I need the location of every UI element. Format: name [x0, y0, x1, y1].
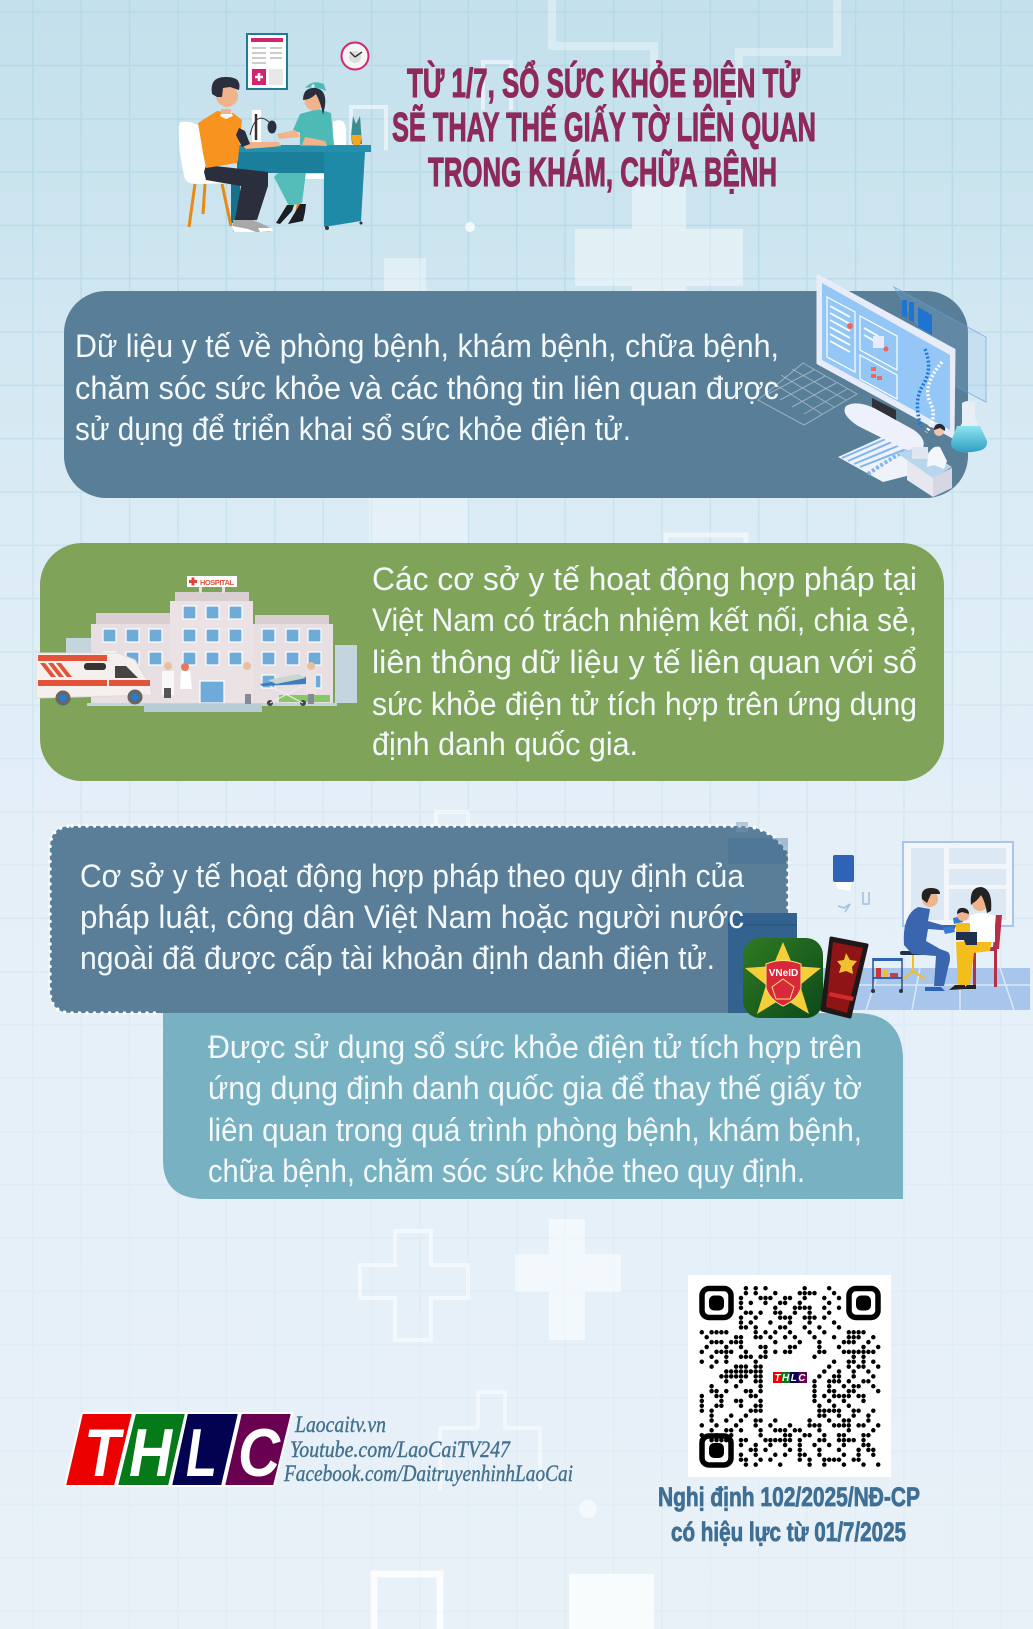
- text: contact links: [283, 1412, 573, 1486]
- text: contact links: Youtube.com/LaoCaiTV247: [290, 1437, 511, 1462]
- logo: THLC: L: [186, 1415, 217, 1491]
- text: usage description: liên quan trong quá trình phòng bệnh, khám bệnh,: [208, 1112, 862, 1148]
- logo: THLC: T: [84, 1415, 125, 1491]
- panel: eligible users: [50, 822, 797, 1013]
- icon: phone: [822, 938, 867, 1017]
- cart: [871, 958, 903, 993]
- text: facility obligations: Việt Nam có trách nhiệm kết nối, chia sẻ,: [372, 602, 917, 638]
- staff: [162, 662, 316, 706]
- desk: [237, 152, 326, 173]
- QR code: [688, 1275, 891, 1477]
- man: [198, 77, 281, 232]
- text: contact links: Laocaitv.vn: [294, 1412, 386, 1437]
- text: data description: sử dụng để triển khai sổ sức khỏe điện tử.: [75, 411, 631, 447]
- title: TRONG KHÁM, CHỮA BỆNH: [428, 149, 777, 195]
- text: eligibility: Cơ sở y tế hoạt động hợp pháp theo quy định của: [80, 858, 744, 894]
- text: decree: Nghị định 102/2025/NĐ-CP: [658, 1482, 920, 1512]
- logo: THLC: C: [238, 1415, 281, 1491]
- panel: health data: [64, 291, 968, 498]
- illustration: doctor visit: [179, 34, 371, 232]
- panel: medical facilities: [36, 543, 944, 781]
- title: TỪ 1/7, SỔ SỨC KHỎE ĐIỆN TỬ: [407, 59, 801, 106]
- icon: VNeID app: VNeID: [769, 968, 798, 979]
- QR logo: THLC: [774, 1373, 806, 1384]
- text: facility obligations: Các cơ sở y tế hoạt động hợp pháp tại: [372, 561, 917, 597]
- wire grid: [758, 363, 857, 425]
- text: usage description: ứng dụng định danh quốc gia để thay thế giấy tờ: [208, 1070, 862, 1106]
- text: data description: chăm sóc sức khỏe và các thông tin liên quan được: [75, 370, 779, 406]
- icon: medical chart: [247, 34, 287, 89]
- blood pressure monitor: [250, 110, 276, 142]
- papers: [838, 435, 930, 482]
- cabinets: [728, 822, 797, 1013]
- text: eligibility: ngoài đã được cấp tài khoản định danh điện tử.: [80, 940, 715, 976]
- towel dispenser: [833, 855, 854, 891]
- logo: THLC: H: [129, 1415, 174, 1491]
- title: [392, 59, 816, 195]
- child: [956, 908, 977, 945]
- hospital sign: HOSPITAL: [200, 578, 234, 587]
- illustration: medical monitor: [818, 276, 987, 497]
- text: data description: Dữ liệu y tế về phòng bệnh, khám bệnh, chữa bệnh,: [75, 328, 779, 364]
- text: usage description: [208, 1029, 862, 1189]
- icon: clock: [342, 42, 368, 70]
- plant: [351, 116, 362, 145]
- window: [903, 842, 1013, 926]
- text: contact links: Facebook.com/DaitruyenhinhLaoCai: [283, 1461, 573, 1486]
- nurse: [277, 82, 334, 146]
- text: eligibility: [80, 858, 744, 976]
- text: facility obligations: định danh quốc gia.: [372, 726, 638, 762]
- text: facility obligations: liên thông dữ liệu y tế liên quan với sổ: [372, 644, 917, 680]
- panel: usage: [163, 1013, 903, 1199]
- doctor: [900, 888, 963, 991]
- chair and mother: [949, 887, 1002, 990]
- icon: VNeID app: [743, 938, 823, 1018]
- icon: flask: [951, 401, 987, 452]
- text: decree: có hiệu lực từ 01/7/2025: [671, 1517, 906, 1547]
- text: usage description: Được sử dụng sổ sức khỏe điện tử tích hợp trên: [208, 1029, 862, 1065]
- text: facility obligations: sức khỏe điện tử tích hợp trên ứng dụng: [372, 686, 917, 722]
- hospital sign: [187, 576, 237, 587]
- nurse chair: [333, 120, 346, 145]
- text: facility obligations: [372, 561, 917, 762]
- text: usage description: chữa bệnh, chăm sóc sức khỏe theo quy định.: [208, 1153, 805, 1189]
- nurse legs: [274, 172, 306, 206]
- text: eligibility: pháp luật, công dân Việt Nam hoặc người nước: [80, 899, 744, 935]
- ambulance: [36, 653, 152, 706]
- logo: THLC: [65, 1413, 292, 1491]
- patient chair: [179, 122, 235, 184]
- illustration: vaccination scene: [728, 842, 1030, 1010]
- text: data description: [75, 328, 779, 447]
- illustration: hospital: [36, 576, 357, 712]
- text: decree: [658, 1482, 920, 1547]
- small desk and scientist: [897, 424, 952, 497]
